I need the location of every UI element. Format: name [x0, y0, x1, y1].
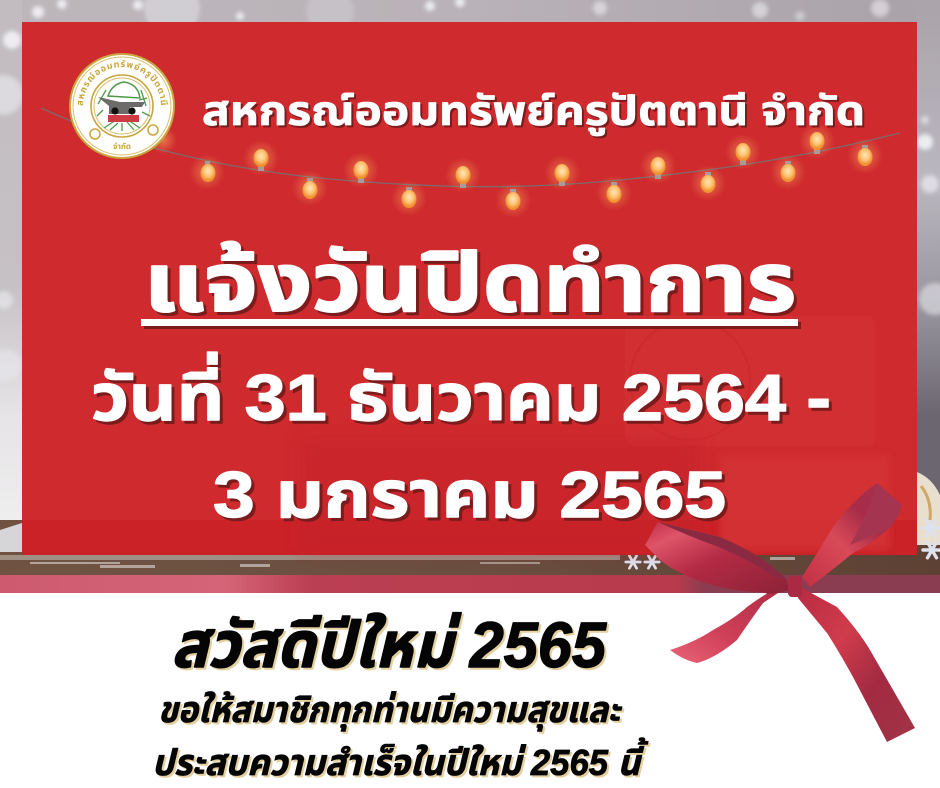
snowflakes on table	[626, 556, 659, 568]
ribbon left loop	[645, 522, 789, 594]
ribbon right loop	[802, 483, 902, 587]
ribbon right tail	[798, 587, 915, 742]
logo seal	[69, 53, 175, 159]
main heading: แจ้งวันปิดทำการ	[144, 238, 796, 329]
ribbon knot	[788, 576, 802, 597]
red panel	[22, 22, 917, 555]
date line one: วันที่ 31 ธันวาคม 2564 -	[91, 352, 831, 434]
heading underline	[141, 319, 798, 326]
date line two: 3 มกราคม 2565	[213, 458, 726, 531]
wooden table with snow	[0, 520, 940, 576]
rose band	[0, 575, 940, 593]
ribbon bow	[645, 483, 915, 742]
string lights	[41, 108, 900, 218]
new year greeting: สวัสดีปีใหม่ 2565	[171, 609, 607, 681]
ribbon left tail	[670, 582, 790, 663]
logo lower text: จำกัด	[113, 141, 131, 151]
photo background: silver bokeh	[0, 0, 940, 520]
ornament at right edge	[917, 472, 940, 558]
wish line one: ขอให้สมาชิกทุกท่านมีความสุขและ	[158, 689, 623, 732]
logo ring text: สหกรณ์ออมทรัพย์ครูปัตตานี	[78, 60, 168, 106]
organisation name: สหกรณ์ออมทรัพย์ครูปัตตานี จำกัด	[202, 88, 865, 136]
wish line two: ประสบความสำเร็จในปีใหม่ 2565 นี้	[152, 737, 649, 783]
